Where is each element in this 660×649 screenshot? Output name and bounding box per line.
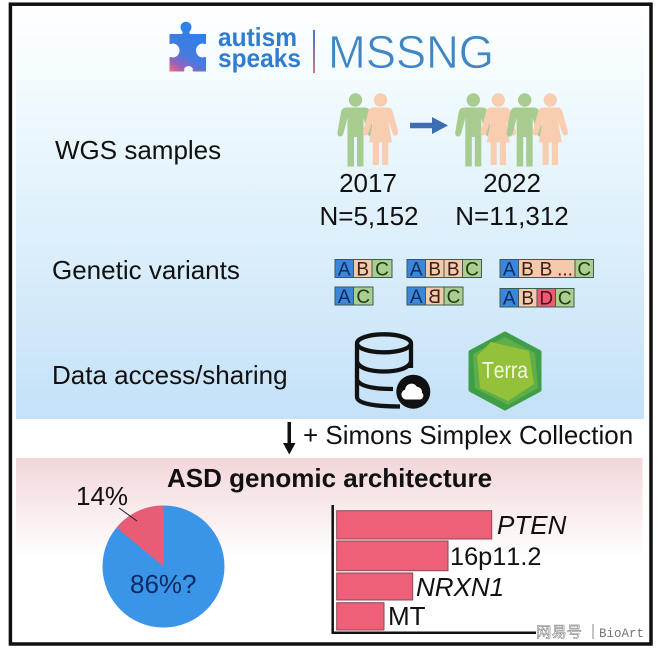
variant: A C: A	[338, 287, 351, 308]
pie slice: 14%	[116, 506, 164, 566]
variant: A B D C: C	[558, 288, 572, 310]
variant: A B B ... C: ...	[557, 260, 573, 280]
label: 2022 sample count	[455, 168, 569, 231]
panel: MSSNG dataset background	[16, 6, 644, 419]
variant: A B B C: C	[465, 260, 479, 280]
panel: ASD genomic architecture background	[16, 458, 642, 641]
variant: A inverted B C: C	[447, 287, 460, 308]
variant: A B D C	[500, 288, 574, 310]
label: + Simons Simplex Collection: + Simons Simplex Collection	[303, 420, 633, 450]
variant: A inverted B C: A	[410, 287, 423, 308]
icon: cloud database	[357, 334, 430, 409]
pie label: 14% with leader line: 14%	[76, 481, 128, 511]
bar: PTEN: PTEN	[497, 510, 567, 540]
bar: PTEN	[337, 510, 567, 540]
label: 2017 sample count: 2017	[339, 168, 397, 198]
variant: A B B C: A	[410, 260, 423, 280]
bar chart: gene contributions	[333, 505, 567, 633]
bar: 16p11.2: 16p11.2	[450, 543, 541, 571]
icon: puzzle piece	[170, 22, 206, 72]
arrow: down to ASD section	[283, 422, 296, 454]
logo text: MSSNG: MSSNG	[328, 26, 494, 78]
bar: NRXN1	[337, 572, 504, 602]
variant: A B C: C	[375, 260, 389, 280]
icon: Terra logo: Terra	[482, 357, 528, 383]
pie label: 86%?: 86%?	[130, 569, 196, 599]
variant: A B C: B	[356, 260, 369, 280]
variant: A B C: A	[338, 260, 351, 280]
logo: autism speaks MSSNG	[170, 22, 494, 78]
genetic variant diagrams	[335, 260, 594, 310]
bar: MT	[337, 601, 426, 631]
variant: A B B ... C: B	[521, 260, 534, 280]
label: 2017 sample count: N=5,152	[319, 201, 419, 231]
bar: NRXN1: NRXN1	[416, 572, 504, 602]
heading: ASD genomic architecture: ASD genomic architecture	[167, 463, 492, 493]
variant: A C	[335, 287, 373, 308]
variant: A B D C: B	[521, 288, 534, 310]
arrow: 2017 to 2022	[410, 117, 448, 134]
label: 2022 sample count: 2022	[483, 168, 541, 198]
watermark: 网易号 BioArt	[536, 624, 644, 641]
bar: 16p11.2	[337, 541, 541, 571]
pie slice: 86%	[102, 506, 224, 628]
label: 2022 sample count: N=11,312	[455, 201, 569, 231]
variant: A inverted B C	[407, 287, 463, 308]
variant: A C: C	[356, 287, 370, 308]
variant: A B D C: A	[503, 288, 516, 310]
logo text: autism: autism	[218, 22, 297, 52]
chart axes	[333, 505, 536, 633]
logo text: speaks: speaks	[218, 43, 301, 73]
label: Data access/sharing: Data access/sharing	[52, 360, 288, 390]
variant: A B B ... C: B	[540, 260, 552, 280]
variant: A B B ... C: A	[503, 260, 516, 280]
label: WGS samples: WGS samples	[55, 135, 221, 165]
label: 2017 sample count	[319, 168, 419, 231]
watermark: 网易号 BioArt: BioArt	[599, 626, 644, 641]
icon: Terra logo	[470, 334, 540, 408]
variant: A B B C: B	[447, 260, 460, 280]
variant: A B B C	[407, 260, 482, 280]
logo divider	[313, 30, 315, 73]
variant: A B C	[335, 260, 392, 280]
variant: A B B C: B	[428, 260, 441, 280]
watermark: 网易号 BioArt: 网易号	[536, 624, 582, 641]
bar: MT: MT	[388, 601, 426, 631]
variant: A inverted B C: B	[428, 287, 441, 308]
variant: A B B ... C: C	[577, 260, 591, 280]
people icons: 2017	[337, 93, 398, 166]
pie chart	[102, 506, 224, 628]
variant: A B D C: D	[539, 288, 553, 310]
label: Genetic variants: Genetic variants	[52, 255, 240, 285]
pie label: 14% with leader line	[76, 481, 137, 521]
people icons: 2022	[455, 93, 568, 166]
variant: A B B ... C	[500, 260, 594, 280]
